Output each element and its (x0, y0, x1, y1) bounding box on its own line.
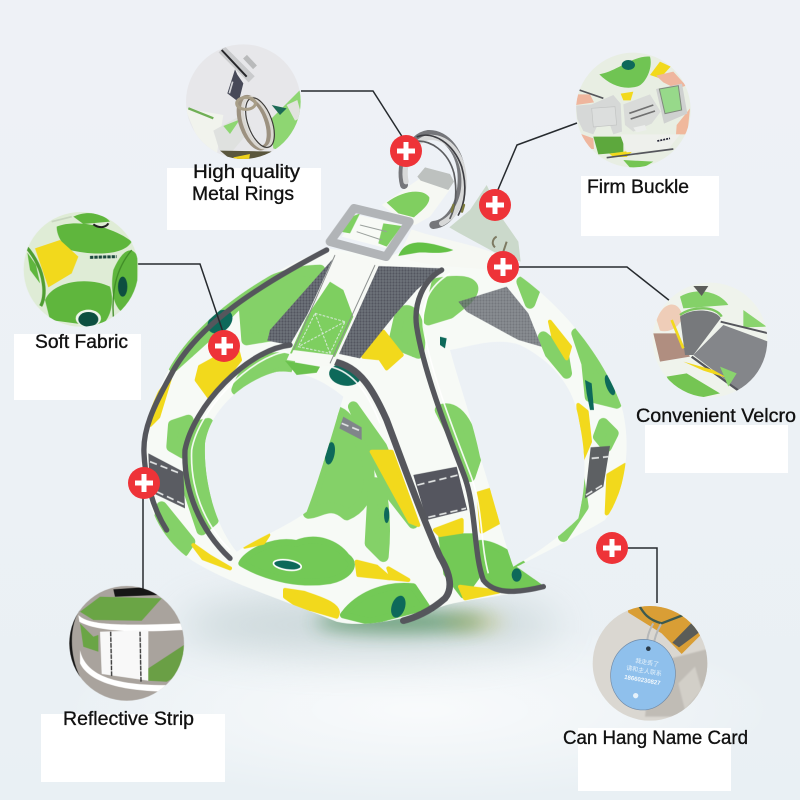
label: Convenient Velcro: Convenient Velcro (636, 406, 796, 427)
white label boxes (14, 168, 788, 791)
fabric print (149, 270, 625, 622)
ground shadow (180, 595, 560, 655)
inset: name tag: 我走丢了 (635, 657, 660, 669)
neck buckle and D-rings (382, 134, 521, 262)
inset: metal rings (186, 44, 301, 159)
leader lines (137, 91, 670, 603)
label: High quality Metal Rings: High quality (193, 162, 301, 183)
inset: name tag: 18660230827 (624, 675, 661, 687)
inset: reflective strip (67, 583, 187, 703)
inset: firm buckle (576, 52, 690, 168)
reflective trim piping (144, 250, 543, 621)
inset: name tag: 请和主人联系 (626, 664, 662, 678)
harness body (142, 249, 626, 624)
label: Can Hang Name Card: Can Hang Name Card (563, 728, 748, 749)
label: Firm Buckle: Firm Buckle (587, 177, 689, 198)
label: Reflective Strip: Reflective Strip (63, 709, 194, 730)
label: Soft Fabric: Soft Fabric (35, 332, 128, 353)
harness illustration (130, 208, 640, 640)
top body strap (398, 229, 495, 269)
central strap (285, 252, 381, 375)
slider buckle (330, 208, 409, 257)
mesh lining (267, 258, 542, 358)
hotspot plus markers (128, 135, 628, 564)
inset: velcro (653, 283, 768, 397)
label: High quality Metal Rings: Metal Rings (192, 184, 294, 205)
inset: soft fabric (24, 212, 138, 326)
label: High quality Metal Rings (192, 162, 301, 205)
reflective strips (148, 417, 610, 520)
inset: name tag (592, 606, 708, 721)
